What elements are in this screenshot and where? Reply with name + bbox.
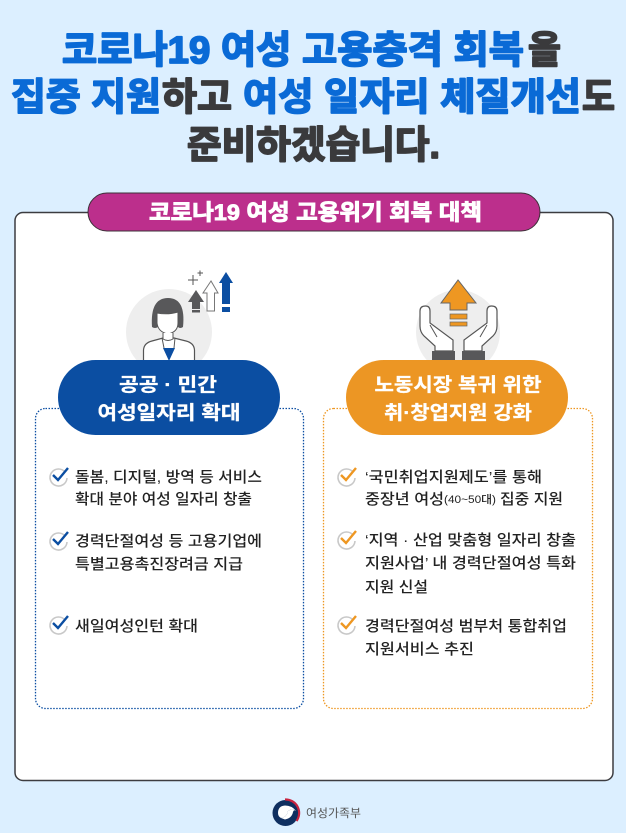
title: 집중 지원 (11, 77, 161, 119)
title: 도 (582, 77, 615, 119)
left heading pill: 여성일자리 확대 (98, 402, 240, 424)
item 5: 지원 신설 (365, 579, 428, 596)
list: right items (338, 468, 576, 658)
icon: check 3 (50, 616, 68, 634)
title: 코로나19 여성 고용충격 회복 (62, 30, 524, 72)
heading pill (88, 193, 540, 231)
title: 여성 일자리 체질개선 (243, 77, 581, 119)
item 4: 중장년 여성 (365, 491, 444, 508)
item 6: 지원서비스 추진 (365, 641, 474, 658)
item 2 (75, 533, 262, 573)
item 6 (365, 618, 567, 658)
icon: check 6 (338, 616, 356, 634)
left heading pill: 공공 · 민간 (119, 374, 217, 396)
item 4: (40~50대) (444, 492, 496, 506)
icon: hands holding up arrow (416, 280, 500, 374)
item 1: 돌봄, 디지털, 방역 등 서비스 (75, 469, 262, 486)
item 5: ‘지역 · 산업 맞춤형 일자리 창출 (365, 532, 576, 549)
icon: check 2 (50, 532, 68, 550)
item 3: 새일여성인턴 확대 (75, 618, 198, 635)
icon: check 1 (50, 468, 68, 486)
logo: ministry emblem and name (272, 799, 361, 826)
icon: check 4 (338, 468, 356, 486)
item 5 (365, 532, 576, 596)
logo: ministry emblem and name: 여성가족부 (306, 807, 361, 820)
item 4 (365, 469, 563, 508)
main panel (15, 212, 613, 780)
item 1 (75, 469, 262, 508)
list: left items (50, 468, 262, 635)
right heading pill: 노동시장 복귀 위한 (374, 374, 542, 396)
title: 준비하겠습니다. (187, 125, 440, 167)
title: 을 (528, 30, 561, 72)
item 2: 특별고용촉진장려금 지급 (75, 556, 243, 573)
heading pill: 코로나19 여성 고용위기 회복 대책 (149, 200, 482, 225)
right heading pill: 취·창업지원 강화 (384, 402, 532, 424)
right heading pill (346, 360, 568, 435)
panel: left dotted box (36, 408, 304, 708)
item 6: 경력단절여성 범부처 통합취업 (365, 618, 567, 635)
item 2: 경력단절여성 등 고용기업에 (75, 533, 262, 550)
icon: check 5 (338, 531, 356, 549)
left heading pill (58, 360, 280, 435)
title (11, 30, 615, 167)
item 1: 확대 분야 여성 일자리 창출 (75, 491, 252, 508)
item 4: 집중 지원 (500, 491, 563, 508)
title: 하고 (162, 77, 232, 119)
item 4: ‘국민취업지원제도’를 통해 (365, 469, 542, 486)
item 5: 지원사업’ 내 경력단절여성 특화 (365, 555, 576, 572)
panel: right dotted box (324, 408, 592, 708)
icon: woman with rising arrows (126, 270, 233, 375)
